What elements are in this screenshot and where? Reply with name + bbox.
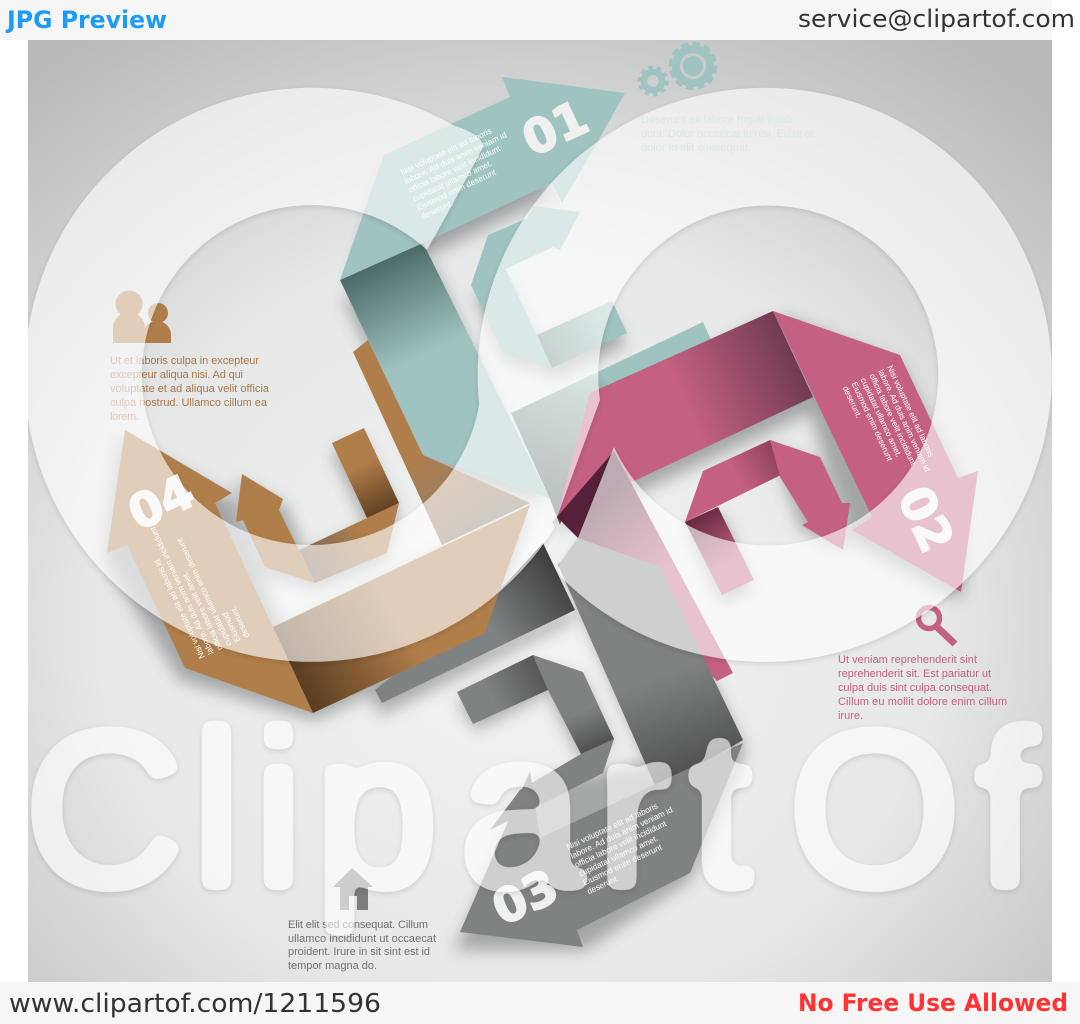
icon: magnifier bbox=[918, 608, 955, 644]
header: email: service@clipartof.com bbox=[798, 5, 1075, 33]
arrow 01 text: cupidatat ullamco amet. bbox=[411, 159, 494, 203]
arrow 01 text: officia labore velit incididunt bbox=[407, 144, 502, 195]
arrow 02 bbox=[773, 311, 978, 592]
people text bbox=[110, 355, 270, 423]
arrow 04 text: deserunt. bbox=[229, 605, 251, 639]
gears text bbox=[641, 114, 814, 154]
magnifier text: reprehenderit sit. Est pariatur ut bbox=[838, 668, 991, 680]
arrow 03 text: Nisi voluptate elit ad laboris bbox=[565, 802, 659, 852]
header: JPG Preview: JPG Preview bbox=[5, 6, 167, 34]
number 01: 01 bbox=[514, 90, 597, 168]
number 02: 02 bbox=[886, 478, 964, 561]
icon: house bbox=[333, 868, 373, 910]
arrow 01 mint back band bbox=[511, 322, 711, 525]
arrow 01 text bbox=[399, 121, 525, 221]
icon: gears bbox=[640, 44, 714, 94]
number 04: 04 bbox=[120, 464, 203, 542]
arrow 02 text: officia labore velit incididunt bbox=[867, 372, 918, 467]
brown lower band bbox=[273, 505, 530, 713]
small gray arrow bbox=[457, 655, 614, 830]
people text: excepteur aliqua nisi. Ad qui bbox=[110, 369, 243, 381]
arrow 02 text bbox=[841, 364, 941, 490]
brown small arrow bbox=[236, 428, 399, 583]
arrow 03 text: Eiusmod enim deserunt bbox=[582, 843, 664, 887]
house text: Elit elit sed consequat. Cillum bbox=[288, 919, 428, 931]
number 03: 03 bbox=[484, 859, 567, 937]
arrow 04 text: cupidatat ullamco enim deserunt bbox=[175, 536, 233, 648]
arrow 02 text: deserunt. bbox=[841, 385, 863, 419]
arrow 02 text: labore. Ad duis anim veniam id bbox=[876, 368, 932, 473]
people text: Ut et laboris culpa in excepteur bbox=[110, 355, 259, 367]
magnifier text: Cillum eu mollit dolore enim cillum bbox=[838, 696, 1007, 708]
gears text: dunt! Dolor occaecat in nisi. Eu ut et bbox=[641, 128, 814, 140]
people text: lorem. bbox=[110, 411, 139, 423]
icon: people bbox=[113, 290, 171, 343]
arrow 02 text: cupidatat ullamco amet. bbox=[859, 376, 903, 459]
arrow 03 text: labore. Ad duis anim veniam id bbox=[569, 805, 674, 861]
magnifier text: irure. bbox=[838, 710, 863, 722]
arrow 03 text: deserunt. bbox=[586, 874, 620, 896]
arrow 03 text bbox=[565, 796, 691, 896]
arrow 01 text: Eiusmod enim deserunt bbox=[416, 168, 498, 212]
arrow 03 text: cupidatat ullamco amet. bbox=[577, 834, 660, 878]
arrow 03 bbox=[460, 743, 743, 947]
house text: ullamco incididunt ut occaecat bbox=[288, 933, 436, 945]
arrow 01 text: Nisi voluptate elit ad laboris bbox=[399, 127, 493, 177]
watermark wordmark: ClipartOf bbox=[25, 686, 1038, 932]
arrow 04 text: Eiusmod bbox=[221, 610, 242, 643]
watermark C and O rings bbox=[25, 88, 1052, 662]
arrow 01 text: labore. Ad duis anim veniam id bbox=[403, 130, 508, 186]
house text: proident. Irure in sit sint est id bbox=[288, 946, 430, 958]
people text: culpa nostrud. Ullamco cillum ea bbox=[110, 397, 268, 409]
small pink arrow bbox=[685, 440, 850, 595]
gears text: Deserunt ex labore fugiat incidi- bbox=[641, 114, 796, 126]
arrow 04 text: officia labore velit amet. bbox=[180, 570, 225, 652]
arrow 04 bbox=[107, 430, 313, 713]
arrow 04 text bbox=[139, 508, 251, 660]
magnifier text: culpa duis sint culpa consequat. bbox=[838, 682, 992, 694]
arrow 02 text: Eiusmod enim deserunt bbox=[850, 381, 894, 463]
arrow 01 mint fold panel bbox=[340, 243, 550, 499]
footer: notice: No Free Use Allowed bbox=[798, 989, 1068, 1017]
arrow 03 text: officia labore velit incididunt bbox=[573, 819, 668, 870]
arrow 01 head bbox=[340, 77, 625, 280]
arrow 04 brown back panel bbox=[353, 340, 530, 545]
arrow 01 text: deserunt. bbox=[420, 199, 454, 221]
magnifier text bbox=[838, 654, 1007, 722]
gears text: dolor in elit consequat. bbox=[641, 142, 751, 154]
arrow 02 text: Nisi voluptate elit ad laboris bbox=[885, 364, 935, 458]
pink band bbox=[557, 311, 813, 517]
gray main panel bbox=[558, 538, 743, 790]
pink lower panel bbox=[557, 451, 733, 681]
house text bbox=[288, 919, 436, 972]
arrow 03 gray back band bbox=[375, 543, 575, 703]
arrow 04 text: Nisi voluptate elit ad laboris id bbox=[153, 558, 207, 660]
people text: voluptate et ad aliqua velit officia bbox=[110, 383, 270, 395]
magnifier text: Ut veniam reprehenderit sint bbox=[838, 654, 977, 666]
small mint arrow bbox=[471, 206, 627, 368]
arrow 04 text: labore. Ad duis anim veniam incididunt bbox=[148, 525, 216, 656]
house text: tempor magna do. bbox=[288, 960, 377, 972]
footer: url: www.clipartof.com/1211596 bbox=[9, 989, 381, 1019]
